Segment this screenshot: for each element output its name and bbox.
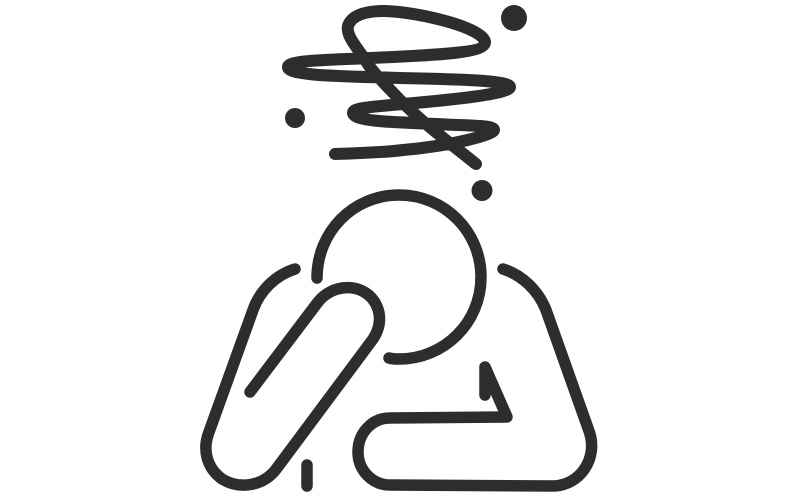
icon: tangled scribble [288,11,510,164]
icon: dot left [285,108,305,128]
icon: dot top right [501,5,527,31]
icon: small tick under elbow [301,465,313,486]
icon: left arm and hand [206,269,380,485]
icon: dot bottom right [472,180,492,201]
icon: head outline [317,195,481,359]
icon: right shoulder and folded arm [358,269,592,486]
